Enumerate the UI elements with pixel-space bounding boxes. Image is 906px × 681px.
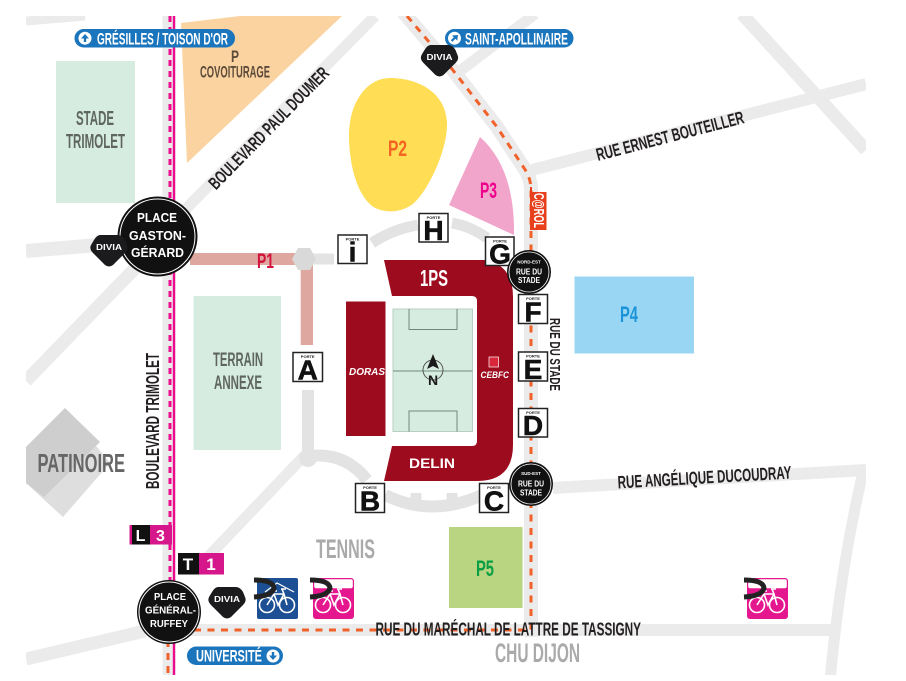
gate H: H bbox=[423, 215, 444, 246]
tram line bbox=[173, 16, 175, 675]
P1 access path: P1 bbox=[257, 250, 274, 273]
parking: P5 bbox=[449, 527, 522, 608]
parking: P2: P2 bbox=[388, 136, 407, 161]
gate G: G bbox=[489, 238, 511, 270]
street: Boulevard Trimolet: BOULEVARD TRIMOLET bbox=[143, 353, 163, 489]
gate D: PORTE bbox=[526, 410, 540, 415]
stop: Rue du Stade sud-est: SUD-EST bbox=[521, 471, 541, 476]
stop: Rue du Stade sud-est bbox=[509, 462, 553, 506]
line badge: L3 bbox=[130, 525, 172, 545]
gate H bbox=[419, 214, 448, 246]
street: Rue du Stade: RUE DU STADE bbox=[546, 318, 563, 391]
Terrain annexe: TERRAIN bbox=[213, 350, 263, 371]
direction pill: Saint-Apollinaire bbox=[445, 29, 574, 48]
gate D: D bbox=[523, 410, 543, 441]
P1 access path bbox=[190, 248, 316, 345]
gate C: C bbox=[484, 486, 504, 516]
line badge: L3: 3 bbox=[156, 528, 165, 545]
label: CHU Dijon: CHU DIJON bbox=[495, 638, 580, 668]
Corol badge: C@ROL bbox=[530, 193, 547, 228]
gate I bbox=[338, 235, 367, 268]
Terrain annexe: ANNEXE bbox=[214, 373, 262, 394]
bike station icon: pink bbox=[310, 578, 354, 619]
parking: P3 bbox=[449, 137, 514, 235]
parking: P2 bbox=[349, 78, 447, 211]
stop: Place Gaston-Gérard: GASTON- bbox=[129, 228, 186, 243]
line badge: T1 bbox=[178, 553, 224, 574]
gate I: PORTE bbox=[346, 236, 360, 242]
gate C: PORTE bbox=[487, 485, 501, 490]
gate C bbox=[480, 484, 508, 516]
gate B: B bbox=[360, 486, 380, 516]
label: 1PS: 1PS bbox=[420, 265, 448, 291]
Patinoire: PATINOIRE bbox=[38, 448, 125, 478]
Divia bus marker: Saint-Apollinaire bbox=[421, 45, 458, 76]
stop: Place Général-Ruffey: PLACE bbox=[154, 591, 186, 603]
gate A: PORTE bbox=[301, 354, 315, 359]
parking: covoiturage bbox=[181, 16, 342, 163]
line badge: T1: T bbox=[183, 555, 194, 574]
main stand horseshoe bbox=[384, 260, 513, 481]
street: Rue du Maréchal de Lattre de Tassigny: RUE DU MARÉCHAL DE LATTRE DE TASSIGNY bbox=[376, 618, 641, 640]
bike station icon: pink east bbox=[744, 578, 788, 619]
stop: Rue du Stade sud-est: RUE DU bbox=[518, 480, 544, 488]
stop: Place Général-Ruffey: RUFFEY bbox=[150, 618, 188, 630]
street: Boulevard Paul Doumer: BOULEVARD PAUL DOUMER bbox=[205, 63, 333, 193]
gate A bbox=[293, 352, 322, 386]
gate E bbox=[518, 352, 548, 385]
gate I: i bbox=[349, 236, 356, 268]
parking: P4 bbox=[574, 276, 694, 354]
Stade Trimolet: TRIMOLET bbox=[66, 131, 125, 153]
gate E: E bbox=[524, 354, 542, 385]
gate H: PORTE bbox=[427, 215, 441, 220]
label: CEBFC bbox=[480, 357, 509, 381]
street: Rue Ernest Bouteiller: RUE ERNEST BOUTEILLER bbox=[594, 107, 746, 165]
stadium bbox=[346, 260, 513, 481]
Stade Trimolet bbox=[56, 61, 135, 203]
gate D bbox=[518, 408, 548, 441]
stop: Place Gaston-Gérard: GÉRARD bbox=[131, 245, 184, 260]
Divia bus marker: Ruffey: DIVIA bbox=[214, 595, 240, 604]
bus line dashes bbox=[168, 16, 172, 585]
gate E: PORTE bbox=[526, 354, 540, 358]
stop: Rue du Stade nord-est bbox=[507, 250, 551, 294]
Divia bus marker: Gaston-Gérard: DIVIA bbox=[96, 243, 122, 252]
line badge: L3: L bbox=[136, 528, 146, 545]
orange bus route bbox=[185, 16, 531, 630]
gate F bbox=[518, 294, 548, 328]
stop: Rue du Stade nord-est: STADE bbox=[518, 276, 541, 285]
Corol badge bbox=[530, 187, 547, 230]
orange route south of Place Général-Ruffey bbox=[166, 644, 170, 673]
parking: P3: P3 bbox=[480, 178, 497, 203]
stop: Place Général-Ruffey: GÉNÉRAL- bbox=[145, 604, 196, 616]
Divia bus marker: Saint-Apollinaire: DIVIA bbox=[426, 53, 453, 62]
gate F: PORTE bbox=[526, 296, 540, 301]
gate B bbox=[356, 484, 384, 516]
line badge: T1: 1 bbox=[206, 555, 216, 574]
Divia bus marker: Ruffey bbox=[208, 587, 246, 618]
gate A: A bbox=[298, 354, 318, 386]
parking: P4: P4 bbox=[620, 302, 639, 327]
stop: Place Général-Ruffey bbox=[137, 580, 201, 644]
gate B: PORTE bbox=[363, 485, 377, 490]
Doras stand: DORAS bbox=[349, 366, 385, 378]
parking: covoiturage: P bbox=[231, 47, 239, 66]
stop: Rue du Stade sud-est: STADE bbox=[520, 488, 543, 498]
street: Rue Angélique Ducoudray: RUE ANGÉLIQUE DUCOUDRAY bbox=[617, 462, 792, 492]
Doras stand bbox=[346, 302, 386, 436]
pitch bbox=[393, 309, 472, 432]
Terrain annexe bbox=[194, 296, 281, 450]
Stade Trimolet: STADE bbox=[76, 108, 114, 130]
stop: Place Gaston-Gérard: PLACE bbox=[137, 210, 177, 225]
direction pill: Saint-Apollinaire: SAINT-APOLLINAIRE bbox=[465, 30, 568, 48]
direction pill: Grésilles / Toison d'Or bbox=[74, 29, 235, 48]
north arrow: N bbox=[428, 372, 438, 388]
stop: Rue du Stade nord-est: NORD-EST bbox=[517, 260, 541, 264]
label: CEBFC: CEBFC bbox=[480, 370, 509, 381]
gate F: F bbox=[524, 296, 542, 328]
Patinoire bbox=[26, 408, 125, 517]
parking: P5: P5 bbox=[476, 556, 494, 581]
label: Tennis: TENNIS bbox=[316, 534, 375, 564]
Divia bus marker: Gaston-Gérard bbox=[90, 235, 128, 266]
bike station icon: blue bbox=[254, 578, 298, 619]
gate G: PORTE bbox=[493, 238, 507, 244]
direction pill: Université: UNIVERSITÉ bbox=[196, 646, 262, 666]
stop: Place Gaston-Gérard bbox=[118, 196, 198, 276]
stop: Rue du Stade nord-est: RUE DU bbox=[516, 268, 542, 276]
north arrow bbox=[423, 354, 443, 388]
label: Delin: DELIN bbox=[409, 456, 455, 471]
parking: covoiturage: COVOITURAGE bbox=[200, 62, 270, 82]
direction pill: Grésilles / Toison d'Or: GRÉSILLES / TOISON D'OR bbox=[97, 30, 228, 48]
